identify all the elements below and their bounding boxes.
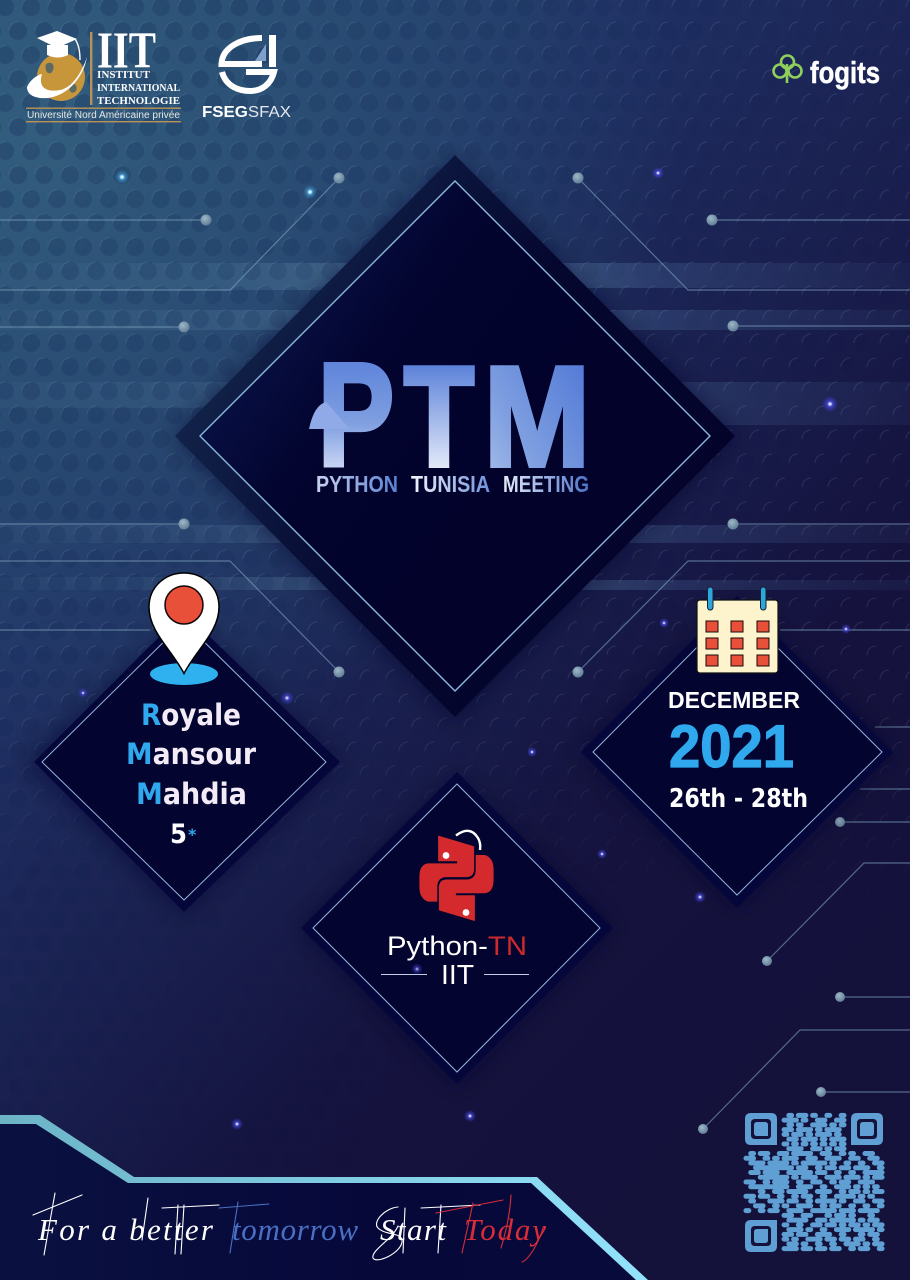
venue text: * <box>188 825 197 844</box>
PTM wordmark: P <box>318 333 394 496</box>
logo: IIT: Université Nord Américaine privée <box>27 110 180 121</box>
footer panel <box>0 1115 648 1280</box>
PTM wordmark: M <box>484 338 590 496</box>
date text <box>668 687 808 814</box>
logo: IIT: IIT <box>97 22 156 80</box>
date text: DECEMBER <box>668 687 800 713</box>
logo: fogits: fogits <box>810 55 880 90</box>
slogan: Start <box>380 1212 447 1247</box>
star over organiser diamond <box>411 963 423 975</box>
logo: IIT: INSTITUT <box>97 69 151 81</box>
circuit lines and nodes <box>0 172 910 1134</box>
logo: FSEG Sfax <box>202 35 292 121</box>
icon: location pin <box>149 573 219 685</box>
tagline: MEETING <box>503 471 589 497</box>
panel: venue diamond <box>26 573 342 916</box>
organiser text <box>381 931 529 990</box>
logo: FSEG Sfax: FSEGSFAX <box>202 104 292 121</box>
logo: fogits <box>774 55 880 90</box>
glowing stars <box>78 167 851 1130</box>
tagline: TUNISIA <box>411 471 490 497</box>
venue text: Royale <box>141 698 241 732</box>
PTM wordmark: T <box>404 338 474 496</box>
icon: python logo <box>419 831 494 922</box>
organiser text: Python- TN <box>387 931 527 961</box>
slogan: Today <box>464 1212 546 1247</box>
QR code <box>745 1113 883 1252</box>
panel: date diamond <box>577 587 897 912</box>
slogan: For a better <box>37 1212 214 1247</box>
organiser text: IIT <box>441 959 474 990</box>
venue text <box>126 698 257 850</box>
icon: calendar <box>697 587 778 673</box>
slogan: tomorrow <box>232 1212 358 1247</box>
PTM wordmark <box>309 333 590 496</box>
date text: 26th - 28th <box>669 784 808 814</box>
logo: IIT: TECHNOLOGIE <box>97 95 180 107</box>
panel: organiser diamond <box>298 772 616 1090</box>
slogan <box>33 1193 546 1262</box>
venue text: 5 <box>170 819 187 850</box>
venue text: Mahdia <box>136 777 247 811</box>
logo: IIT: INTERNATIONAL <box>97 82 180 94</box>
tagline: PYTHON <box>316 471 398 497</box>
tagline <box>316 471 589 497</box>
logo: IIT <box>26 22 181 122</box>
panel: main PTM diamond <box>175 155 735 722</box>
venue text: Mansour <box>126 737 257 771</box>
date text: 2021 <box>669 713 794 780</box>
